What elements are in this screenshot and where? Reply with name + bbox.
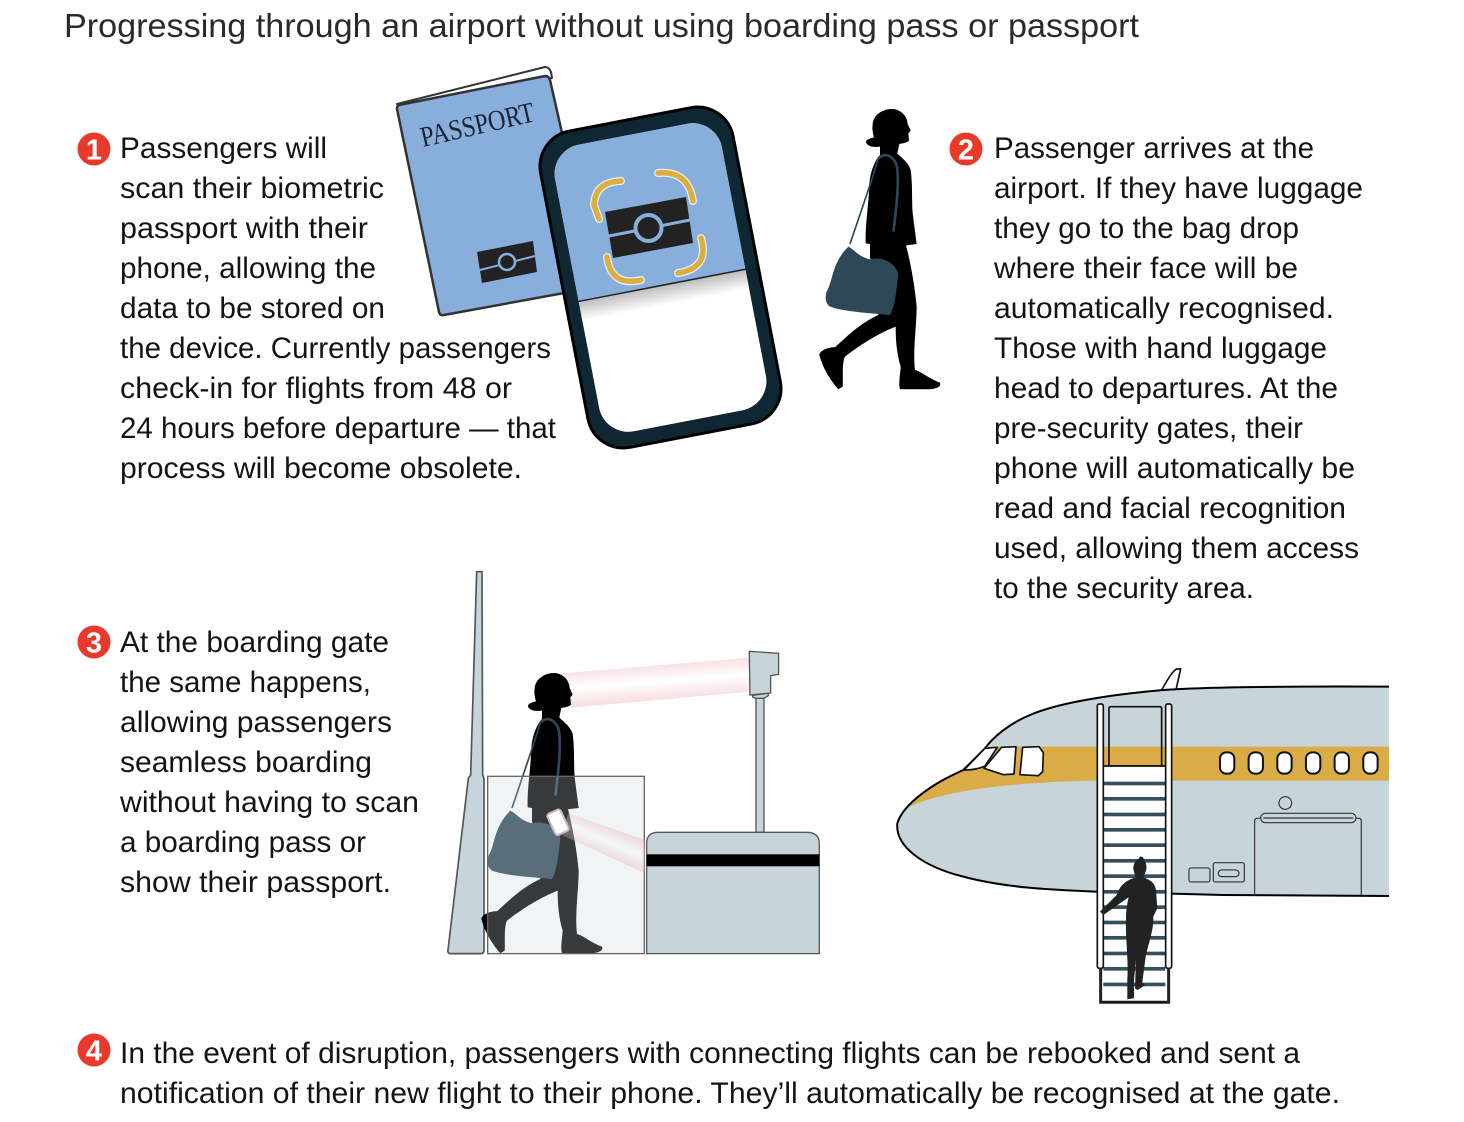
- step 3 text: seamless boarding: [120, 746, 372, 779]
- step 2 badge: [950, 132, 982, 166]
- step 1 text: process will become obsolete.: [120, 452, 522, 485]
- step 1 text: the device. Currently passengers: [120, 332, 551, 365]
- step 1 text: data to be stored on: [120, 292, 385, 325]
- gold stripe: [906, 747, 1389, 808]
- step 1 text: [120, 132, 557, 485]
- step 2 text: read and facial recognition: [994, 492, 1346, 525]
- passenger silhouette: [481, 673, 602, 953]
- title: Progressing through an airport without using boarding pass or passport: [64, 7, 1139, 44]
- step 1 text: Passengers will: [120, 132, 327, 165]
- chip on phone screen: [605, 197, 693, 258]
- step 4 badge: [78, 1034, 110, 1068]
- step 3 text: without having to scan: [119, 786, 419, 819]
- face scan beam: [562, 658, 749, 708]
- step 4 text: notification of their new flight to their phone. They’ll automatically be recognised at the gate.: [120, 1077, 1340, 1110]
- fin antenna: [1162, 669, 1181, 690]
- step 2 text: head to departures. At the: [994, 372, 1338, 405]
- fuselage: [897, 686, 1389, 896]
- step 2 text: used, allowing them access: [994, 532, 1359, 565]
- step 2 text: they go to the bag drop: [994, 212, 1299, 245]
- step 1 text: passport with their: [120, 212, 368, 245]
- silhouette: walking passenger with bag: [819, 109, 940, 389]
- step 2 text: airport. If they have luggage: [994, 172, 1363, 205]
- step 1 badge: [78, 132, 110, 166]
- step 1 text: 24 hours before departure — that: [120, 412, 557, 445]
- step 2 badge: 2: [958, 134, 974, 166]
- step 3 badge: [78, 626, 110, 660]
- step 4 text: [120, 1037, 1340, 1110]
- step 3 text: allowing passengers: [120, 706, 392, 739]
- passport label: PASSPORT: [417, 96, 538, 154]
- step 4 badge: 4: [86, 1036, 102, 1068]
- boarding passenger silhouette: [1100, 857, 1157, 999]
- icon: passport: [397, 67, 597, 315]
- handheld phone: [546, 809, 570, 836]
- boarding stairs: [1097, 704, 1172, 1002]
- icon: phone scanning passport: [534, 101, 787, 454]
- step 2 text: Those with hand luggage: [994, 332, 1327, 365]
- gate post: [448, 572, 484, 954]
- step 2 text: pre-security gates, their: [994, 412, 1303, 445]
- cockpit windows: [964, 747, 1043, 776]
- illustration: boarding gate: [448, 572, 819, 954]
- step 3 text: the same happens,: [120, 666, 371, 699]
- step 3 text: [119, 626, 419, 899]
- step 3 text: At the boarding gate: [120, 626, 389, 659]
- step 1 text: scan their biometric: [120, 172, 384, 205]
- step 3 badge: 3: [86, 628, 102, 660]
- step 3 text: a boarding pass or: [120, 826, 366, 859]
- biometric chip symbol: [477, 241, 537, 283]
- cabin windows: [1220, 752, 1378, 774]
- step 2 text: Passenger arrives at the: [994, 132, 1314, 165]
- step 1 text: phone, allowing the: [120, 252, 376, 285]
- camera unit: [749, 651, 779, 832]
- step 2 text: to the security area.: [994, 572, 1254, 605]
- step 3 text: show their passport.: [120, 866, 391, 899]
- aircraft door: [1109, 707, 1162, 766]
- scanner desk: [647, 832, 819, 954]
- step 2 text: automatically recognised.: [994, 292, 1334, 325]
- glass gate panel: [488, 776, 644, 954]
- cargo door and panels: [1189, 797, 1361, 895]
- step 4 text: In the event of disruption, passengers with connecting flights can be rebooked and sent a: [120, 1037, 1300, 1070]
- step 2 text: where their face will be: [993, 252, 1298, 285]
- step 2 text: [993, 132, 1363, 605]
- step 1 text: check-in for flights from 48 or: [120, 372, 512, 405]
- step 2 text: phone will automatically be: [994, 452, 1355, 485]
- scan brackets: [594, 173, 703, 281]
- step 1 badge: 1: [86, 134, 102, 166]
- phone scan beam: [562, 813, 645, 873]
- illustration: aircraft with boarding stairs: [897, 669, 1389, 1002]
